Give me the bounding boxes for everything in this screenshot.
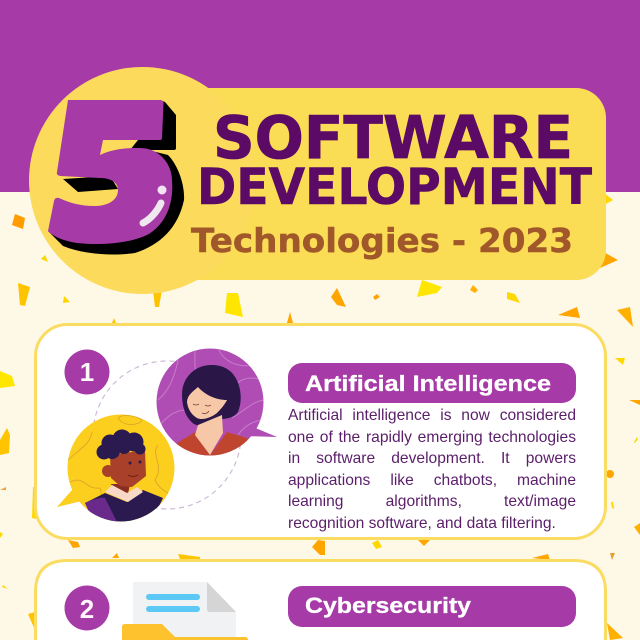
- title banner: DEVELOPMENT: [197, 158, 592, 216]
- subtitle text: Technologies - 2023: [191, 221, 573, 260]
- number badge 2: 2: [80, 594, 94, 624]
- number badge 1: 1: [80, 357, 94, 387]
- number badge 2: [64, 586, 110, 630]
- big number 5: [48, 100, 184, 255]
- body text: artificial intelligence: Artificial intelligence is now considered: [288, 407, 576, 424]
- body text: artificial intelligence: learning algorithms, text/image: [288, 493, 576, 510]
- body text: artificial intelligence: in software development. It powers: [288, 450, 576, 467]
- man avatar: [57, 414, 174, 530]
- purple header band: [0, 0, 640, 192]
- body text: artificial intelligence: recognition software, and data filtering.: [288, 515, 556, 532]
- body text: artificial intelligence: [288, 407, 576, 532]
- woman avatar: [156, 348, 277, 460]
- title text: SOFTWARE: [213, 103, 573, 172]
- body text: artificial intelligence: applications like chatbots, machine: [288, 472, 576, 489]
- panel: artificial intelligence: [36, 324, 606, 538]
- confetti: [0, 193, 640, 640]
- heading pill: cybersecurity: [288, 586, 576, 627]
- heading pill: artificial intelligence: Artificial Intelligence: [305, 371, 551, 396]
- title banner: [29, 67, 606, 294]
- panel: cybersecurity: [36, 560, 606, 640]
- illustration: two people talking: [57, 348, 277, 530]
- icon: document folder: [122, 582, 248, 640]
- body text: artificial intelligence: one of the rapidly emerging technologies: [288, 429, 576, 446]
- heading pill: artificial intelligence: [288, 363, 576, 403]
- number badge 1: [64, 350, 110, 394]
- heading pill: cybersecurity: Cybersecurity: [305, 593, 472, 618]
